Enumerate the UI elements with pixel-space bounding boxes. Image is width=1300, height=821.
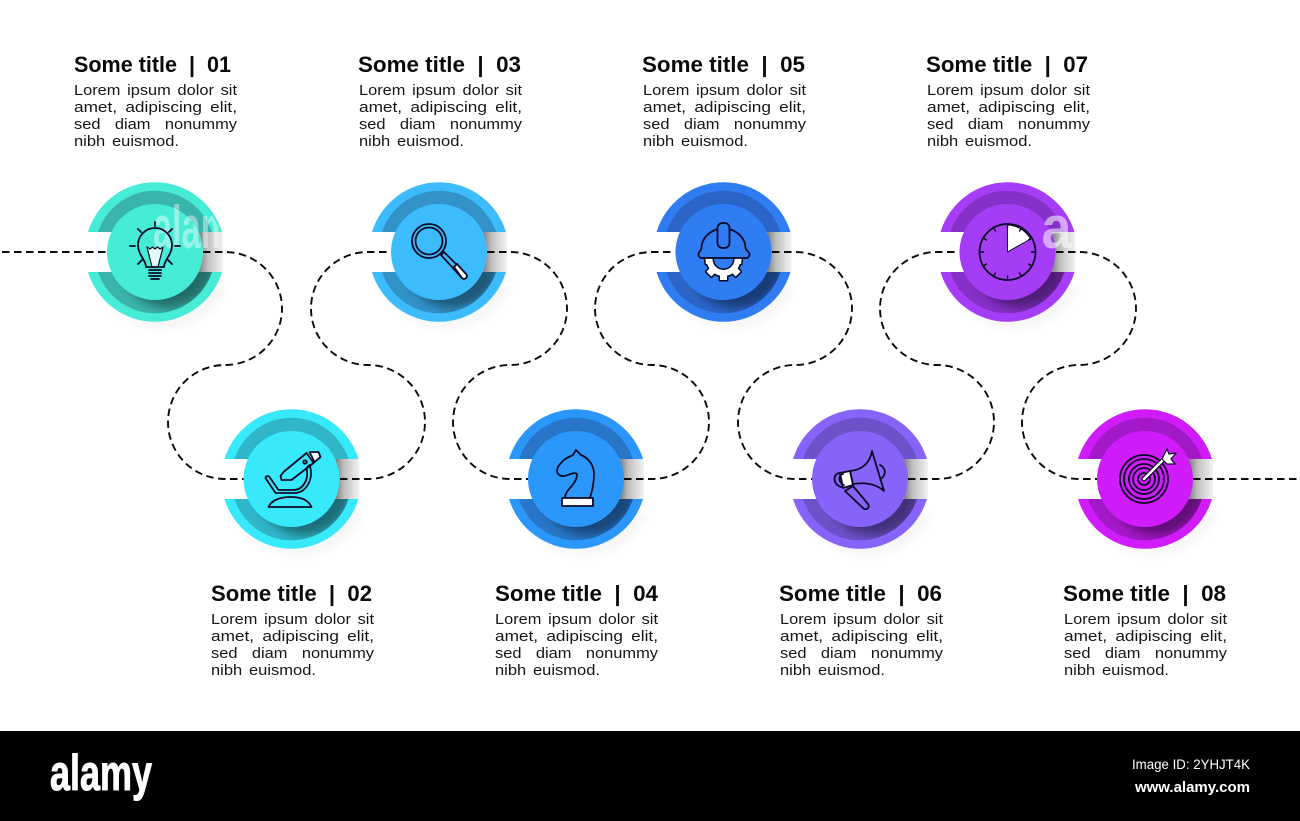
- node 3: sky blue circle with magnifier: [372, 182, 512, 330]
- body text: step 06: sed diam nonummy: [780, 645, 944, 662]
- body text: step 07: [927, 82, 1091, 150]
- body text: step 04: Lorem ipsum dolor sit: [495, 611, 659, 628]
- step 8 text block: [1063, 581, 1228, 679]
- body text: step 07: amet, adipiscing elit,: [927, 99, 1090, 116]
- body text: step 08: [1064, 611, 1228, 679]
- icon: clock: [980, 224, 1036, 280]
- step 3 text block: [358, 52, 523, 150]
- body text: step 02: sed diam nonummy: [211, 645, 375, 662]
- step 1 text block: [74, 52, 238, 150]
- body text: step 01: amet, adipiscing elit,: [74, 99, 237, 116]
- step 4 text block: [495, 581, 659, 679]
- node 4: blue circle with chess knight: [509, 409, 649, 557]
- heading: step 05: Some title | 05: [642, 52, 805, 77]
- body text: step 04: nibh euismod.: [495, 662, 600, 679]
- step 2 text block: [211, 581, 375, 679]
- heading: step 01: Some title | 01: [74, 52, 231, 77]
- body text: step 03: [359, 82, 523, 150]
- body text: step 05: sed diam nonummy: [643, 116, 807, 133]
- body text: step 01: [74, 82, 238, 150]
- body text: step 08: sed diam nonummy: [1064, 645, 1228, 662]
- body text: step 06: Lorem ipsum dolor sit: [780, 611, 944, 628]
- body text: step 08: Lorem ipsum dolor sit: [1064, 611, 1228, 628]
- dashed connector path: [2, 252, 1297, 479]
- heading: step 04: Some title | 04: [495, 581, 659, 606]
- icon: target with dart: [1120, 449, 1176, 503]
- step 7 text block: [926, 52, 1091, 150]
- body text: step 03: amet, adipiscing elit,: [359, 99, 522, 116]
- heading: step 03: Some title | 03: [358, 52, 521, 77]
- watermark fragment: alam: [153, 194, 231, 261]
- body text: step 06: [780, 611, 944, 679]
- body text: step 02: nibh euismod.: [211, 662, 316, 679]
- heading: step 02: Some title | 02: [211, 581, 372, 606]
- body text: step 03: nibh euismod.: [359, 133, 464, 150]
- node 7: purple circle with clock: [940, 182, 1080, 330]
- image id: Image ID: 2YHJT4K: [1132, 756, 1251, 772]
- node 5: royal blue circle with helmet and gear: [656, 182, 796, 330]
- node 1: teal circle with light bulb: [88, 182, 223, 322]
- body text: step 03: sed diam nonummy: [359, 116, 523, 133]
- step 5 text block: [642, 52, 807, 150]
- body text: step 07: sed diam nonummy: [927, 116, 1091, 133]
- node 2: cyan circle with microscope: [224, 409, 364, 557]
- footer logo: alamy: [50, 745, 152, 801]
- body text: step 02: amet, adipiscing elit,: [211, 628, 374, 645]
- node 6: violet circle with megaphone: [793, 409, 933, 557]
- body text: step 06: amet, adipiscing elit,: [780, 628, 943, 645]
- footer bar: [0, 731, 1300, 821]
- heading: step 08: Some title | 08: [1063, 581, 1226, 606]
- node 8: magenta circle with target: [1078, 409, 1218, 557]
- icon: megaphone: [834, 451, 885, 509]
- body text: step 02: Lorem ipsum dolor sit: [211, 611, 375, 628]
- body text: step 07: Lorem ipsum dolor sit: [927, 82, 1091, 99]
- body text: step 08: amet, adipiscing elit,: [1064, 628, 1227, 645]
- heading: step 07: Some title | 07: [926, 52, 1088, 77]
- icon: light bulb: [130, 222, 180, 279]
- body text: step 06: nibh euismod.: [780, 662, 885, 679]
- body text: step 07: nibh euismod.: [927, 133, 1032, 150]
- body text: step 01: nibh euismod.: [74, 133, 179, 150]
- body text: step 04: amet, adipiscing elit,: [495, 628, 658, 645]
- body text: step 05: Lorem ipsum dolor sit: [643, 82, 807, 99]
- body text: step 04: [495, 611, 659, 679]
- body text: step 02: [211, 611, 375, 679]
- body text: step 05: nibh euismod.: [643, 133, 748, 150]
- icon: magnifier: [412, 224, 467, 279]
- body text: step 01: Lorem ipsum dolor sit: [74, 82, 238, 99]
- icon: helmet and gear: [698, 223, 750, 280]
- body text: step 01: sed diam nonummy: [74, 116, 238, 133]
- body text: step 05: amet, adipiscing elit,: [643, 99, 806, 116]
- website: www.alamy.com: [1134, 779, 1250, 796]
- body text: step 05: [643, 82, 807, 150]
- step 6 text block: [779, 581, 944, 679]
- watermark fragment: a: [1042, 194, 1072, 261]
- body text: step 08: nibh euismod.: [1064, 662, 1169, 679]
- body text: step 04: sed diam nonummy: [495, 645, 659, 662]
- heading: step 06: Some title | 06: [779, 581, 942, 606]
- icon: microscope: [266, 452, 320, 507]
- body text: step 03: Lorem ipsum dolor sit: [359, 82, 523, 99]
- icon: chess knight: [557, 450, 594, 506]
